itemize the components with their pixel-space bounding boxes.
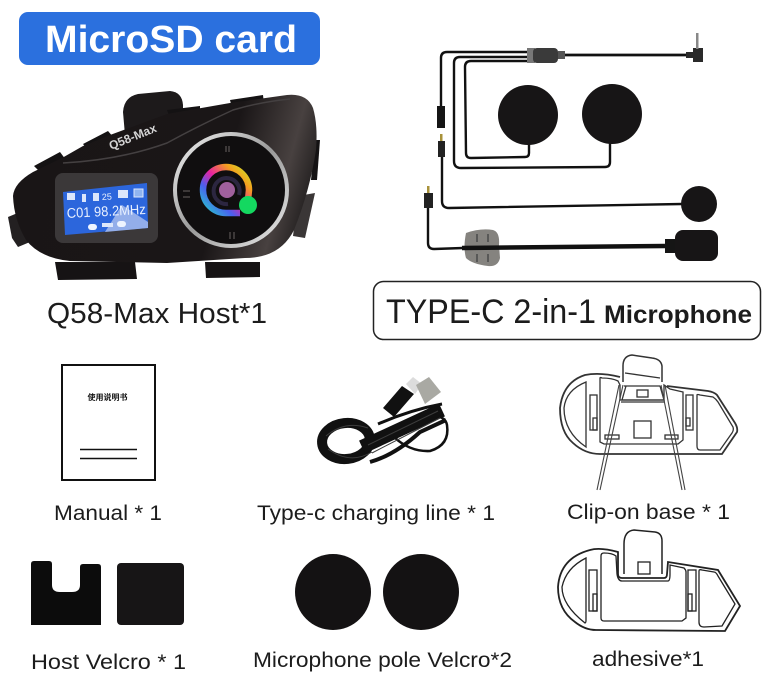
- label: adhesive: adhesive*1: [592, 647, 704, 671]
- label box: TYPE-C 2-in-1 Microphone: [374, 282, 760, 340]
- round button with rainbow logo: [175, 134, 287, 246]
- LCD screen: 25: [102, 191, 112, 202]
- heading: MicroSD card: [19, 12, 320, 65]
- connectors: [437, 106, 445, 128]
- LCD screen: [55, 173, 158, 243]
- product: Q58-Max host device: [8, 91, 320, 280]
- product: headset speakers and microphones: [424, 33, 718, 266]
- heading: MicroSD card: MicroSD card: [45, 19, 297, 61]
- product: Q58-Max host device: Q58-Max: [107, 121, 159, 153]
- icon: microphone pole velcro circles: [295, 554, 459, 630]
- label box: TYPE-C 2-in-1 Microphone: Microphone: [604, 301, 752, 329]
- splitter: [527, 48, 535, 63]
- label: Q58-Max Host: Q58-Max Host*1: [47, 298, 267, 330]
- icon: manual booklet: [62, 365, 155, 480]
- icon: coiled Type-C charging cable: [320, 377, 447, 462]
- label: manual: Manual * 1: [54, 501, 162, 525]
- icon: host velcro pieces: [31, 561, 184, 625]
- icon: clip-on base: [560, 355, 737, 490]
- right-angle plug: [686, 48, 703, 62]
- speaker pads: [498, 85, 558, 145]
- boom microphone: [464, 229, 500, 266]
- label: host velcro: Host Velcro * 1: [31, 650, 186, 674]
- LCD screen: C01 98.2MHz: [66, 201, 146, 221]
- label: microphone pole velcro: Microphone pole Velcro*2: [253, 648, 512, 672]
- label: clip-on base: Clip-on base * 1: [567, 500, 730, 524]
- icon: manual booklet: 使用说明书: [88, 392, 128, 402]
- icon: adhesive: [558, 530, 740, 631]
- label: charging line: Type-c charging line * 1: [257, 501, 495, 525]
- label box: TYPE-C 2-in-1 Microphone: TYPE-C 2-in-1: [386, 293, 596, 331]
